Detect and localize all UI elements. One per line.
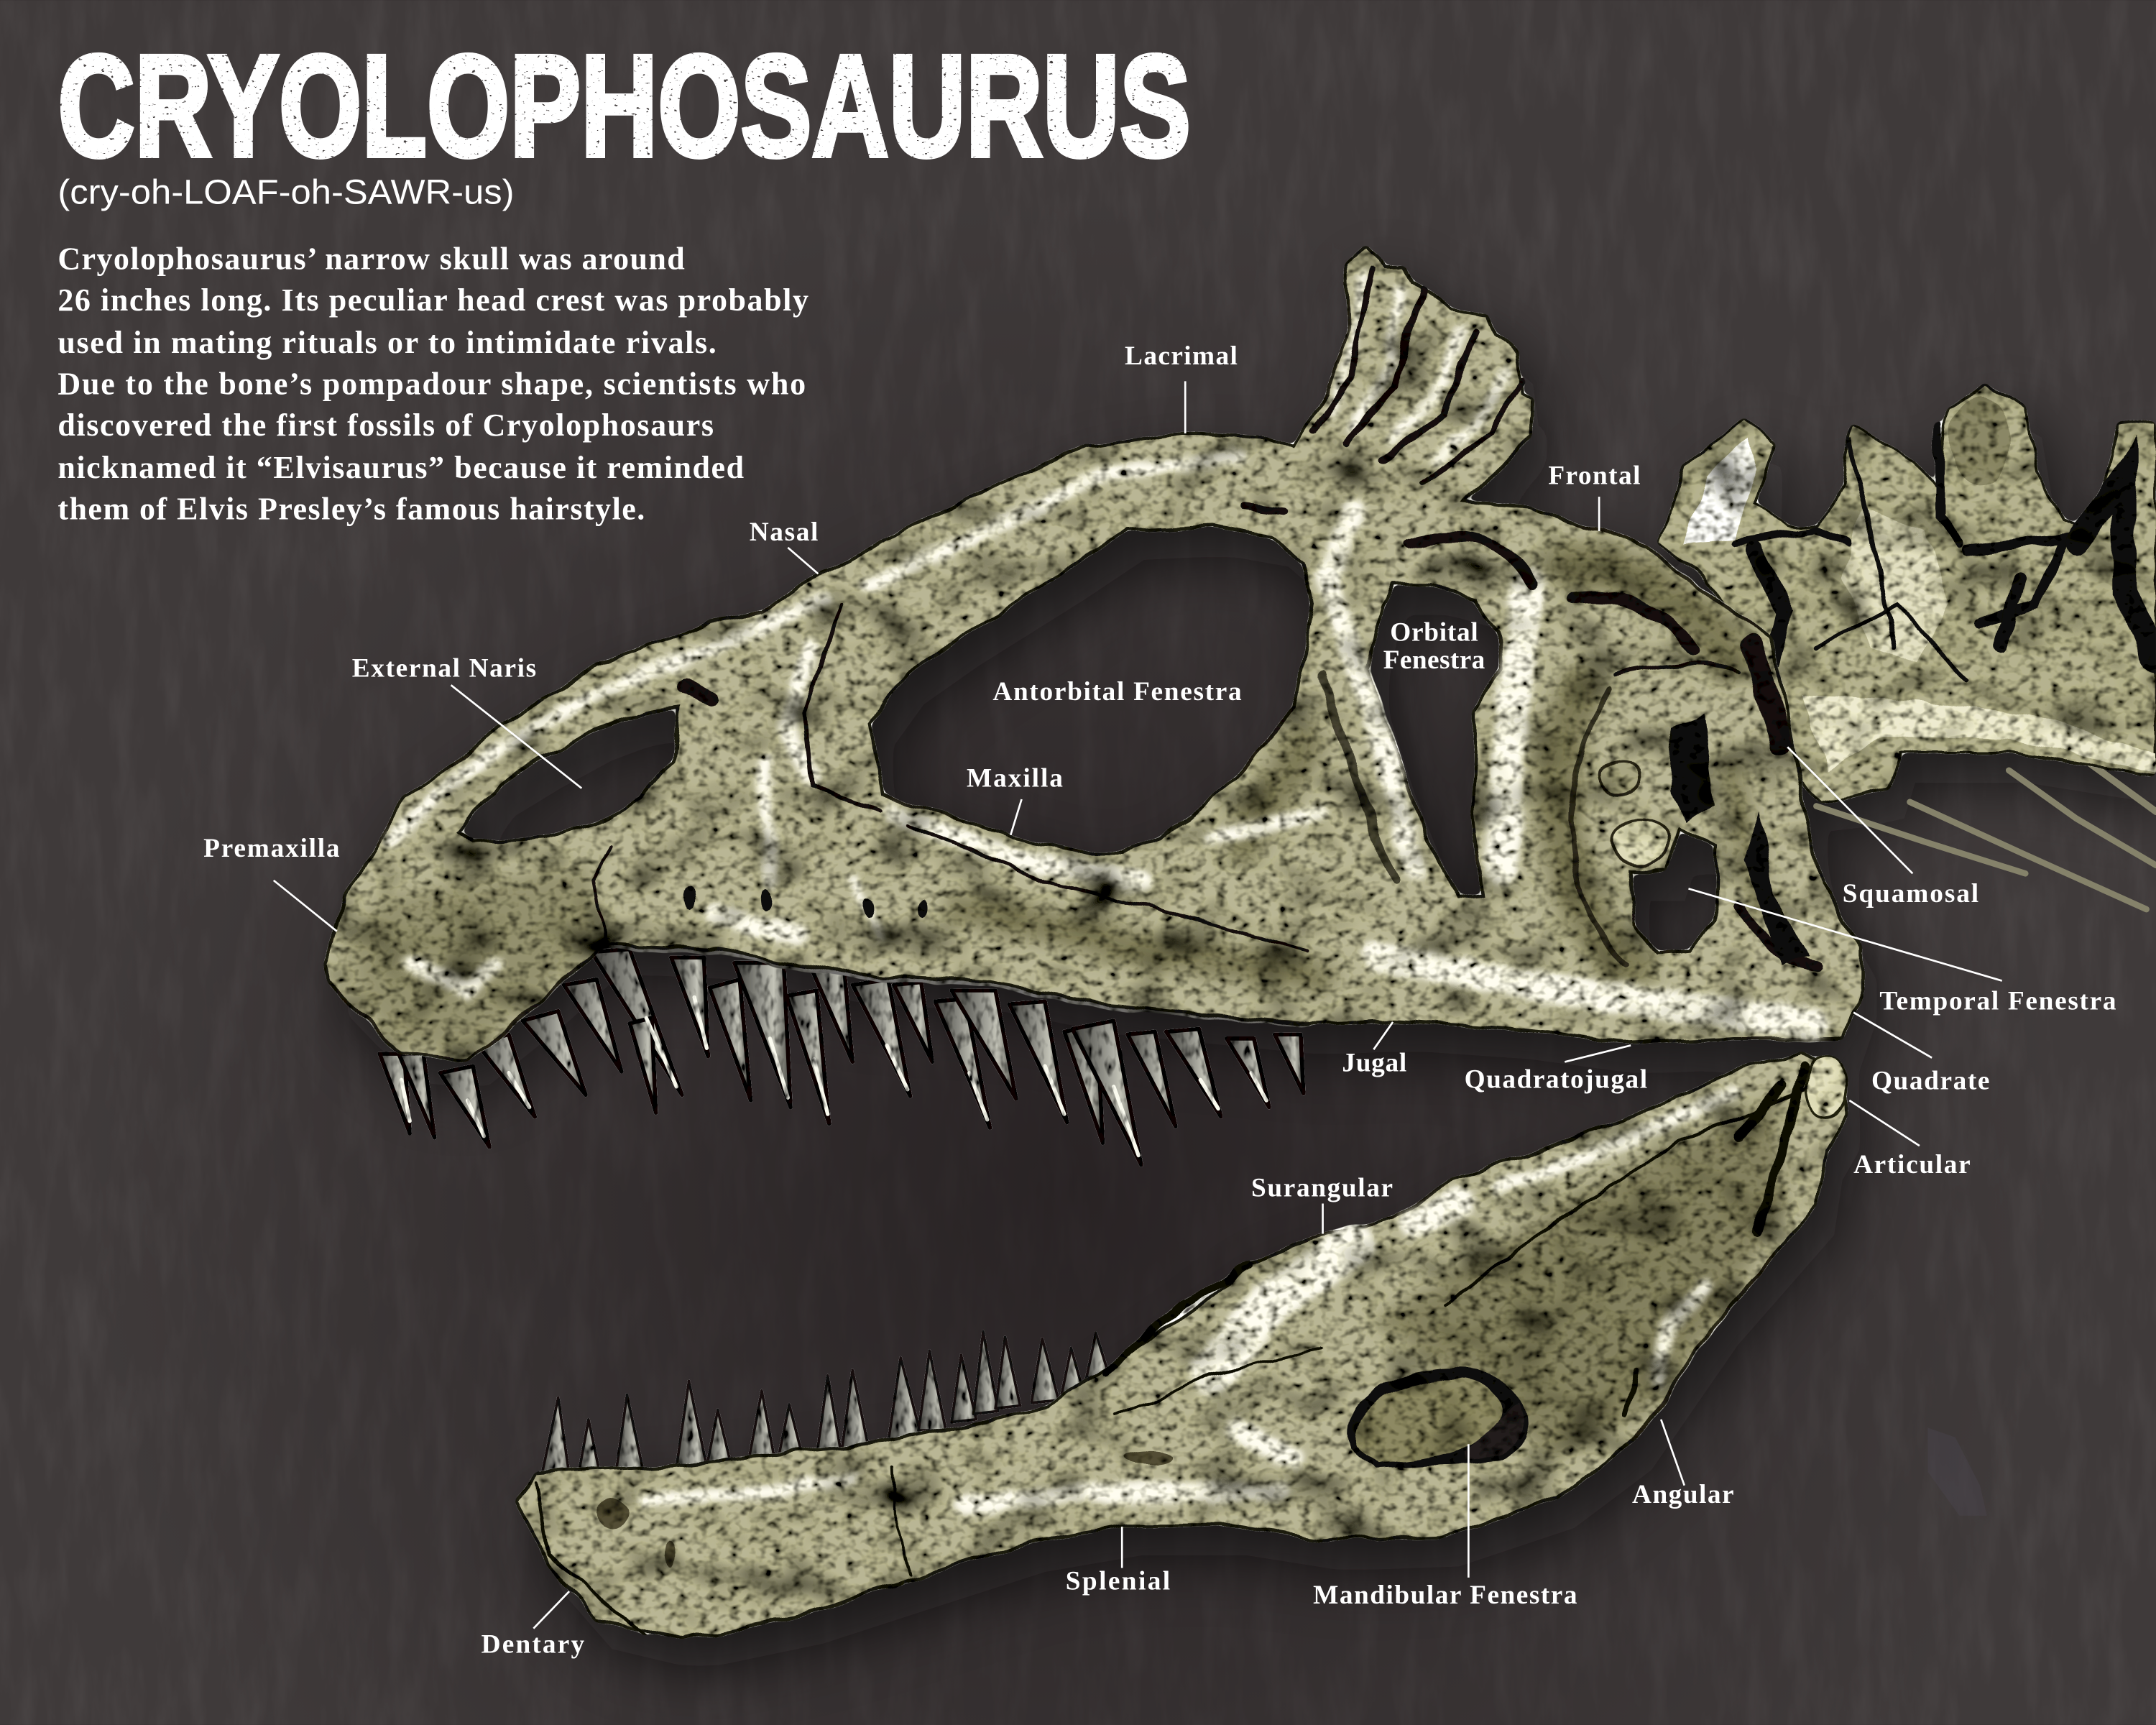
description text — [57, 241, 808, 527]
label: Nasal: Nasal — [750, 518, 818, 547]
upper teeth — [379, 949, 1304, 1165]
label: Orbital Fenestra — [1383, 618, 1485, 675]
jaw creases — [536, 1066, 1815, 1637]
mid-tone regions — [962, 564, 1760, 977]
bone highlights — [392, 275, 1815, 1025]
label: Quadratojugal — [1465, 1045, 1647, 1094]
label: Frontal — [1548, 461, 1641, 531]
tooth highlights — [402, 998, 1266, 1156]
label: Angular — [1632, 1420, 1734, 1509]
articular knob — [1805, 1057, 1847, 1117]
label: Surangular: Surangular — [1251, 1174, 1393, 1203]
label: Orbital Fenestra: Fenestra — [1383, 645, 1485, 675]
label: Temporal Fenestra — [1688, 888, 2116, 1016]
label: Frontal: Frontal — [1548, 461, 1641, 490]
label: Squamosal: Squamosal — [1843, 879, 1978, 908]
jaw highlights — [646, 1093, 1733, 1506]
pronunciation: (cry-oh-LOAF-oh-SAWR-us) — [57, 174, 515, 212]
upper skull — [326, 247, 1861, 1059]
label: Articular — [1849, 1100, 1971, 1179]
description text: discovered the first fossils of Cryolophosaurs — [57, 408, 714, 443]
vertebrae — [1659, 385, 2156, 804]
label: Jugal — [1342, 1022, 1406, 1077]
label: Dentary — [482, 1591, 584, 1660]
description text: nicknamed it “Elvisaurus” because it reminded — [57, 450, 744, 485]
label: Orbital Fenestra: Orbital — [1390, 618, 1478, 648]
lower teeth — [542, 1331, 1108, 1474]
label: Quadrate — [1853, 1013, 1989, 1095]
jaw blotches — [595, 1451, 1173, 1568]
label: Angular: Angular — [1632, 1480, 1734, 1509]
label: Mandibular Fenestra: Mandibular Fenestra — [1313, 1581, 1577, 1610]
description text: 26 inches long. Its peculiar head crest was probably — [57, 282, 808, 318]
label: Nasal — [750, 518, 818, 574]
label: Jugal: Jugal — [1342, 1048, 1406, 1077]
label: Splenial: Splenial — [1066, 1567, 1170, 1596]
premaxilla darker patch — [344, 864, 599, 1052]
label: Premaxilla — [203, 834, 340, 932]
label: Lacrimal: Lacrimal — [1125, 341, 1238, 371]
title: CRYOLOPHOSAURUS — [57, 25, 1191, 187]
label: External Naris — [352, 653, 581, 788]
cast shadows — [342, 277, 2156, 1670]
label: Dentary: Dentary — [482, 1630, 584, 1660]
cervical ribs — [1816, 763, 2156, 909]
mandibular fenestra — [1348, 1368, 1529, 1469]
dark foramina and cavities — [683, 715, 1810, 963]
description text: them of Elvis Presley’s famous hairstyle. — [57, 492, 645, 527]
label: Quadrate: Quadrate — [1871, 1066, 1989, 1095]
label: Squamosal — [1787, 747, 1978, 908]
label: Premaxilla: Premaxilla — [203, 834, 340, 863]
description text: Due to the bone’s pompadour shape, scientists who — [57, 367, 806, 402]
skull bone — [326, 247, 1861, 1059]
neck vertebrae and ribs — [1659, 385, 2156, 909]
description text: used in mating rituals or to intimidate rivals. — [57, 325, 717, 360]
label: Maxilla: Maxilla — [967, 763, 1063, 793]
bone creases — [594, 268, 1818, 1025]
vertebra creases — [1736, 426, 2156, 681]
label: Antorbital Fenestra: Antorbital Fenestra — [992, 677, 1242, 707]
lower jaw — [515, 1052, 1847, 1639]
mandible mid-tone area — [1375, 1100, 1787, 1458]
label: Articular: Articular — [1853, 1150, 1971, 1179]
label: Quadratojugal: Quadratojugal — [1465, 1064, 1647, 1094]
label: External Naris: External Naris — [352, 653, 536, 683]
bony knobs in temporal region — [1599, 760, 1669, 865]
label: Temporal Fenestra: Temporal Fenestra — [1879, 986, 2116, 1016]
jaw bone — [515, 1052, 1847, 1639]
label: Maxilla — [967, 763, 1063, 835]
description text: Cryolophosaurus’ narrow skull was around — [57, 241, 685, 276]
